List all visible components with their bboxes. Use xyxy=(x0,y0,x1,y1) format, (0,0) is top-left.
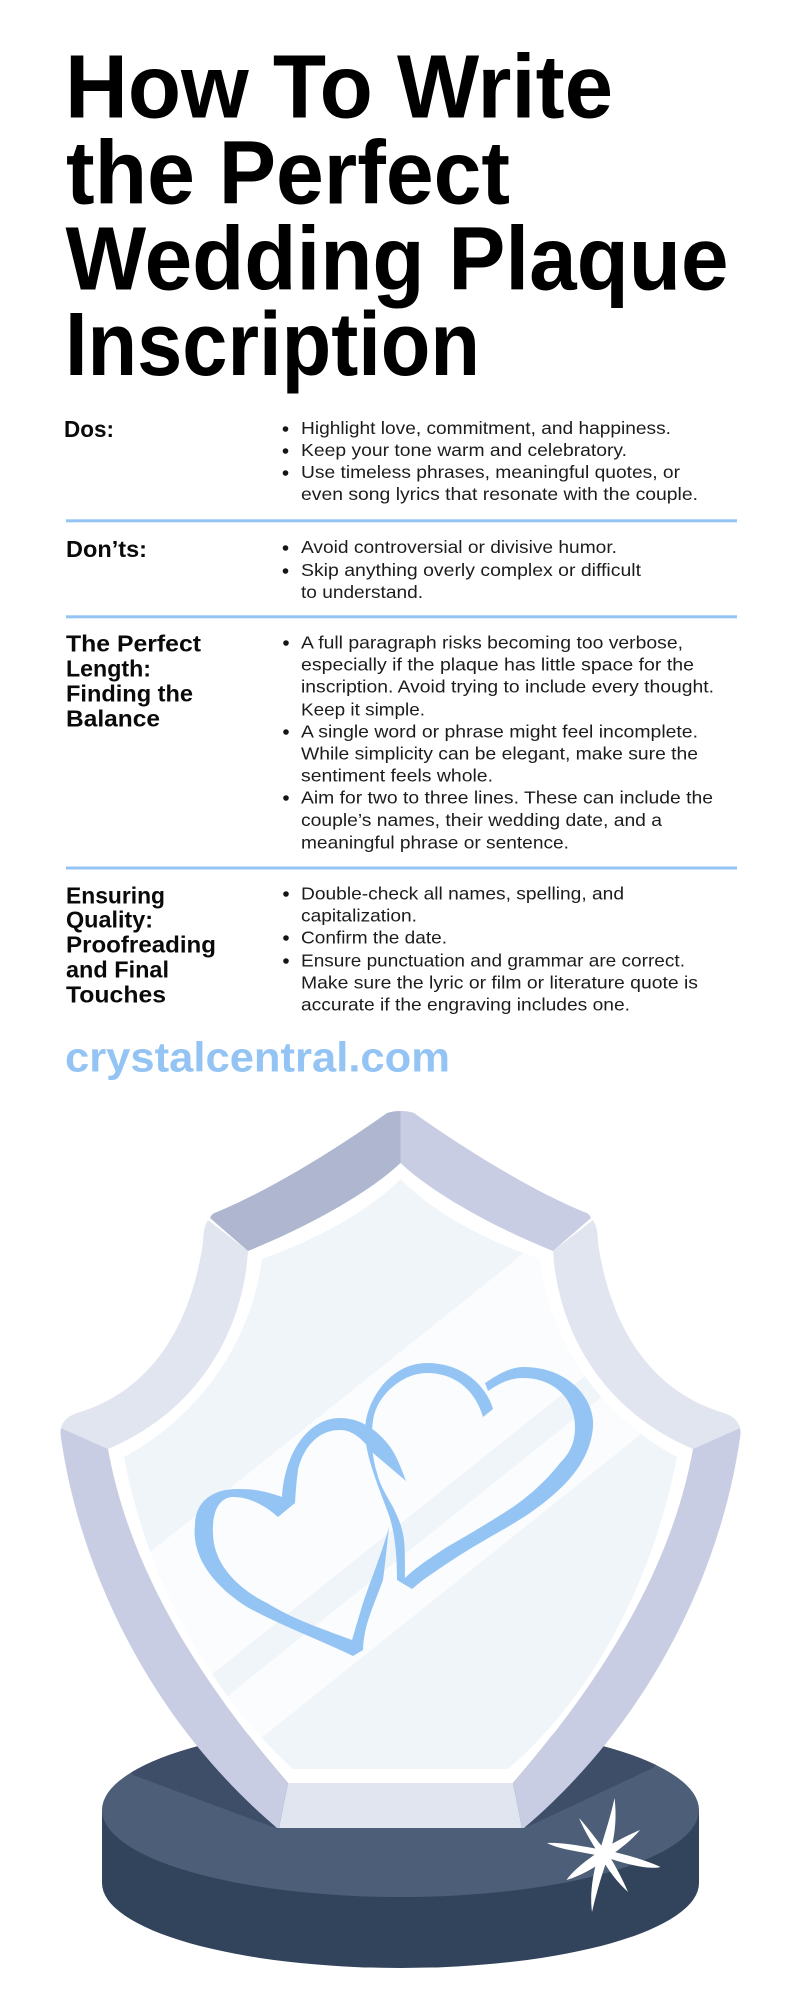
title xyxy=(65,37,728,395)
list: ensuring quality: Make sure the lyric or film or literature quote is xyxy=(301,972,698,992)
list: don'ts xyxy=(283,537,641,602)
list: ensuring quality xyxy=(283,883,698,1014)
panel: ensuring quality xyxy=(66,882,698,1014)
list: the perfect length xyxy=(283,632,714,852)
list: the perfect length: Aim for two to three lines. These can include the xyxy=(301,787,713,807)
list: dos: Highlight love, commitment, and happiness. xyxy=(301,418,671,438)
title: Inscription xyxy=(65,295,480,395)
heading: the perfect length: Balance xyxy=(66,706,160,732)
heading: don'ts: Don’ts: xyxy=(66,536,147,562)
base: dark cylinder xyxy=(102,1735,699,1968)
list: ensuring quality: accurate if the engraving includes one. xyxy=(301,994,630,1014)
list: ensuring quality: capitalization. xyxy=(301,905,417,925)
icon: two interlocking hearts xyxy=(195,1363,593,1656)
heading: ensuring quality: Touches xyxy=(66,981,166,1007)
list: dos xyxy=(283,418,698,504)
list: the perfect length: especially if the plaque has little space for the xyxy=(301,655,694,675)
list: dos: Keep your tone warm and celebratory. xyxy=(301,440,627,460)
list: don'ts: Skip anything overly complex or difficult xyxy=(301,560,641,580)
heading: the perfect length: Finding the xyxy=(66,681,193,707)
list: ensuring quality: Double-check all names, spelling, and xyxy=(301,883,624,903)
list: the perfect length: While simplicity can be elegant, make sure the xyxy=(301,743,698,763)
list: the perfect length: A full paragraph risks becoming too verbose, xyxy=(301,632,683,652)
list: ensuring quality: Ensure punctuation and grammar are correct. xyxy=(301,951,685,971)
heading: ensuring quality: Quality: xyxy=(66,907,153,933)
list: ensuring quality: Confirm the date. xyxy=(301,927,447,947)
list: don'ts: Avoid controversial or divisive humor. xyxy=(301,537,617,557)
heading: dos: Dos: xyxy=(64,416,114,442)
list: dos: even song lyrics that resonate with the couple. xyxy=(301,484,698,504)
website url: crystalcentral.com xyxy=(65,1034,450,1081)
list: the perfect length: Keep it simple. xyxy=(301,699,425,719)
title: Wedding Plaque xyxy=(66,209,728,309)
panel: don'ts xyxy=(66,536,641,602)
title: How To Write xyxy=(65,37,613,137)
list: the perfect length: inscription. Avoid trying to include every thought. xyxy=(301,677,714,697)
panel: dos xyxy=(64,416,698,504)
list: dos: Use timeless phrases, meaningful quotes, or xyxy=(301,462,680,482)
heading: the perfect length: Length: xyxy=(66,656,151,682)
list: don'ts: to understand. xyxy=(301,582,423,602)
list: the perfect length: A single word or phrase might feel incomplete. xyxy=(301,721,698,741)
panel: the perfect length xyxy=(66,631,714,852)
list: the perfect length: couple’s names, their wedding date, and a xyxy=(301,810,662,830)
title: the Perfect xyxy=(66,123,510,223)
illustration: crystal plaque on base xyxy=(60,1111,740,1968)
heading: ensuring quality: Ensuring xyxy=(66,882,165,908)
heading: the perfect length: The Perfect xyxy=(66,631,201,657)
plaque: glass panel xyxy=(124,1180,677,1769)
plaque: beveled frame xyxy=(60,1111,740,1828)
heading: the perfect length xyxy=(66,631,201,732)
heading: ensuring quality xyxy=(66,882,216,1007)
list: the perfect length: sentiment feels whole. xyxy=(301,765,493,785)
heading: ensuring quality: Proofreading xyxy=(66,931,216,957)
heading: ensuring quality: and Final xyxy=(66,956,169,982)
list: the perfect length: meaningful phrase or sentence. xyxy=(301,832,569,852)
icon: sparkle xyxy=(547,1798,660,1912)
